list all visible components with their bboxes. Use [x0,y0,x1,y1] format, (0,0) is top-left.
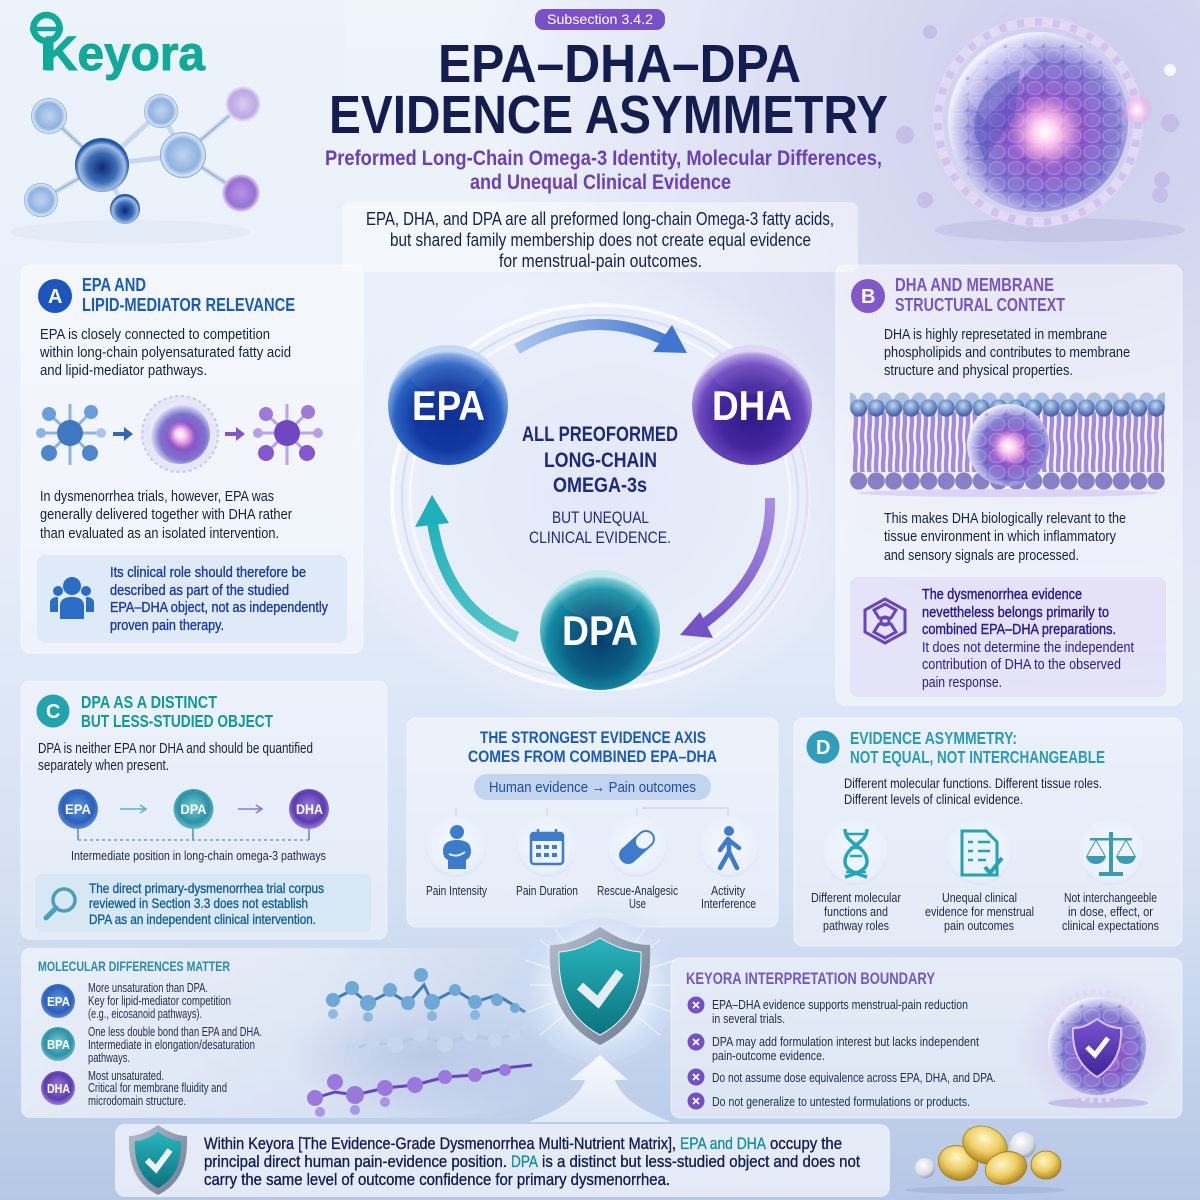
arrow: EPA to DHA [517,324,687,353]
label: molecular [811,890,902,933]
molecule illustration [10,86,261,244]
item 1: EPA–DHA evidence supports menstrual-pain reduction [712,997,968,1012]
central statement [522,423,678,547]
panel A: EPA and lipid-mediator relevance [21,265,363,653]
callout text B: pain response. [922,674,1002,691]
sphere: DHA row [41,1071,75,1105]
arrow: DPA to EPA [415,495,517,637]
text: BPA row: pathways. [88,1051,130,1065]
heading D: EVIDENCE ASYMMETRY: [850,728,1017,748]
text: EPA trials [40,488,292,542]
badge: Subsection [535,9,665,30]
icon: blue molecule [36,404,106,465]
text: EPA intro [39,326,291,379]
panel: bottom conclusion [115,1124,890,1197]
list: boundary statements [688,996,996,1110]
conclusion text: occupy the [770,1134,842,1153]
icon: DNA [822,819,888,885]
sphere: DPA small [174,789,214,829]
label: clinical evidence: evidence for menstrual [925,904,1034,919]
sphere: EPA row [41,984,75,1018]
pill: human evidence: Human evidence → Pain outcomes [489,779,696,796]
heading D: NOT EQUAL, NOT INTERCHANGEABLE [850,747,1105,767]
label: clinical evidence: pain outcomes [944,918,1014,933]
heading B: STRUCTURAL CONTEXT [895,294,1066,315]
icon: capsule [607,817,667,877]
icon: scales [1078,819,1144,885]
callout text C [89,880,324,927]
icon: glowing cell [142,396,218,472]
label: activity interference: Interference [701,896,756,911]
central statement: ALL PREOFORMED [522,423,678,446]
item 2 [688,1034,979,1063]
badge A: A [48,286,62,308]
logo: Keyora: Keyora [43,28,205,81]
arrow: DHA to DPA [680,498,770,638]
icon: people [50,577,94,619]
callout text A: EPA–DHA object, not as independently [110,599,328,616]
text: EPA trials: than evaluated as an isolated intervention. [40,525,279,542]
heading [468,728,717,766]
heading B [895,274,1066,315]
text: DHA row: microdomain structure. [88,1094,186,1108]
callout text B: combined EPA–DHA preparations. [922,621,1116,638]
illustration: softgel capsules [905,1119,1065,1194]
intro text block: but shared family membership does not create equal evidence [390,230,811,250]
text: DHA intro: DHA is highly represetated in membrane [884,326,1107,343]
sphere: EPA [388,345,508,465]
text: EPA row: (e.g., eicosanoid pathways). [88,1007,202,1021]
label: molecular: functions and [824,904,888,919]
intro text block: for menstrual-pain outcomes. [499,251,702,271]
item 4: Do not generalize to untested formulations or products. [712,1094,970,1109]
heading C: BUT LESS-STUDIED OBJECT [81,711,273,731]
text: differences: Different molecular functions. Different tissue roles. [844,775,1102,791]
callout text A: described as part of the studied [110,582,289,599]
badge D [806,730,840,764]
text: EPA intro: EPA is closely connected to competition [40,326,270,343]
title: EPA–DHA–DPA [438,34,801,94]
illustration: cell with purple shield [1043,992,1151,1108]
illustration: blue fatty-acid chain [326,968,525,1022]
panel B: DHA and membrane structural context [836,265,1182,705]
heading C [81,692,273,731]
callout text A: proven pain therapy. [110,617,224,634]
central cycle diagram [388,305,812,690]
text: DHA relevance [884,510,1126,564]
conclusion text: Within Keyora [The Evidence-Grade Dysmenorrhea Multi-Nutrient Matrix], [204,1134,676,1153]
panel: Keyora interpretation boundary [671,958,1182,1118]
label: clinical evidence [925,890,1034,933]
sphere: BPA row [41,1027,75,1061]
text: differences [844,775,1102,807]
label: clinical evidence: Unequal clinical [942,890,1017,905]
title: EVIDENCE ASYMMETRY [329,85,888,145]
sphere: DHA [692,345,812,465]
text: DHA intro: structure and physical properties. [884,362,1073,379]
callout A [37,555,347,643]
label: not interchangeable: clinical expectations [1062,918,1159,933]
central statement: OMEGA-3s [553,474,647,497]
badge: Subsection: Subsection 3.4.2 [547,11,653,27]
text: DHA intro [884,326,1130,379]
text: BPA row: One less double bond than EPA and DHA. [88,1025,262,1039]
label: activity interference [701,883,756,911]
text: EPA intro: and lipid-mediator pathways. [40,362,207,379]
arrow: upward swoosh [528,1055,672,1122]
item 2: pain-outcome evidence. [712,1048,825,1063]
badge B [851,279,885,313]
badge D: D [816,737,830,759]
callout text C: The direct primary-dysmenorrhea trial corpus [89,880,324,896]
badge B: B [861,286,875,308]
text: DHA intro: phospholipids and contributes to membrane [884,344,1130,361]
label: rescue-analgesic use [597,883,678,911]
subtitle: Preformed Long-Chain Omega-3 Identity, Molecular Differences, [325,147,882,170]
arrow [225,427,245,441]
conclusion text: is a distinct but less-studied object and does not [542,1152,860,1171]
sphere: BPA row: BPA [47,1037,71,1052]
panel D: evidence asymmetry [794,718,1182,946]
heading: MOLECULAR DIFFERENCES MATTER [38,958,230,974]
panel: molecular differences matter [21,948,565,1118]
text: DPA intro [38,741,313,774]
panel C: DPA as a distinct object [21,681,387,939]
label: not interchangeable: Not interchangeeble [1064,890,1157,905]
icon: walking person [699,817,759,877]
illustration: pale fatty-acid chain [345,1026,522,1057]
panel: strongest evidence axis [407,718,778,927]
heading A [82,274,295,315]
icon: pain intensity [426,817,486,877]
text: DHA relevance: and sensory signals are processed. [884,547,1079,564]
label: molecular: pathway roles [823,918,889,933]
item 3: Do not assume dose equivalence across EPA, DHA, and DPA. [712,1070,996,1085]
heading A: EPA AND [82,274,146,295]
central statement: LONG-CHAIN [544,449,657,472]
icon: magnifier [46,889,75,918]
text: DHA row: Critical for membrane fluidity and [88,1081,227,1095]
text: BPA row: Intermediate in elongation/desaturation [88,1038,255,1052]
sphere: DPA [540,570,660,690]
text: DHA row: Most unsaturated. [88,1069,164,1083]
text: EPA row: More unsaturation than DPA. [88,981,208,995]
callout text A: Its clinical role should therefore be [110,564,306,581]
heading: KEYORA INTERPRETATION BOUNDARY [686,969,936,988]
sphere: DHA small: DHA [296,801,323,817]
item 1: in several trials. [712,1011,785,1026]
item 1 [688,996,968,1026]
label: pain intensity: Pain Intensity [426,883,487,898]
heading A: LIPID-MEDIATOR RELEVANCE [82,294,295,315]
conclusion text: carry the same level of outcome confidence for primary dysmenorrhea. [204,1170,670,1189]
text: EPA intro: within long-chain polyensaturated fatty acid [39,344,291,361]
heading: COMES FROM COMBINED EPA–DHA [468,747,717,766]
sphere: DHA small [289,789,329,829]
sphere: DHA row: DHA [47,1081,70,1096]
central statement: BUT UNEQUAL [552,508,649,527]
subtitle: and Unequal Clinical Evidence [470,171,731,194]
callout C [35,874,371,932]
label: pain duration: Pain Duration [516,883,578,898]
heading B: DHA AND MEMBRANE [895,274,1054,295]
label: not interchangeable: in dose, effect, or [1068,904,1154,919]
conclusion text: DPA [511,1152,539,1171]
text: DPA intro: separately when present. [38,758,169,774]
caption: Intermediate position in long-chain omega-3 pathways [71,848,326,863]
text: differences: Different levels of clinical evidence. [844,791,1023,807]
icon: checklist document [946,819,1012,885]
callout text B: contribution of DHA to the observed [922,656,1121,673]
callout text A [110,564,328,634]
intro text block: EPA, DHA, and DPA are all preformed long-chain Omega-3 fatty acids, [366,209,834,229]
subtitle [325,147,882,194]
sphere: DPA small: DPA [180,801,206,817]
sphere: EPA row: EPA [47,994,71,1009]
intro text block [342,202,858,272]
text: EPA trials: generally delivered together with DHA rather [40,506,292,523]
label: molecular: Different molecular [811,890,902,905]
callout B [850,577,1166,697]
item 3 [688,1068,996,1086]
label: rescue-analgesic use: Rescue-Analgesic [597,883,678,898]
diagram: EPA DPA DHA pathway [58,789,329,863]
callout text B: It does not determine the independent [922,639,1135,656]
heading: THE STRONGEST EVIDENCE AXIS [480,728,706,747]
callout text B: The dysmenorrhea evidence [922,586,1082,603]
icon: shield [129,1125,187,1195]
heading D [850,728,1105,767]
arrow [113,427,133,441]
conclusion text: principal direct human pain-evidence position. [204,1152,507,1171]
illustration: membrane bilayer [850,392,1165,497]
label: activity interference: Activity [711,883,745,898]
heading C: DPA AS A DISTINCT [81,692,217,712]
label: rescue-analgesic use: Use [629,896,646,911]
callout text B [922,586,1135,691]
sphere: EPA small: EPA [65,801,91,817]
callout text C: reviewed in Section 3.3 does not establish [89,895,308,911]
central statement: CLINICAL EVIDENCE. [529,528,671,547]
label: not interchangeable [1062,890,1159,933]
badge C: C [46,701,60,723]
sphere: DPA: DPA [562,607,638,654]
text: BPA row [88,1025,262,1065]
icon: hexagon [865,599,905,643]
badge A [38,279,72,313]
sphere: DHA: DHA [712,382,792,429]
text: DHA relevance: This makes DHA biologically relevant to the [884,510,1126,527]
text: DPA intro: DPA is neither EPA nor DHA and should be quantified [38,741,313,757]
item 2: DPA may add formulation interest but lacks independent [712,1034,979,1049]
sphere: EPA small [58,789,98,829]
title [329,34,888,145]
callout text B: nevettheless belongs primarily to [922,604,1109,621]
text: EPA trials: In dysmenorrhea trials, however, EPA was [40,488,274,505]
text: EPA row: Key for lipid-mediator competition [88,994,231,1008]
illustration: cell with glowing core [896,22,1185,242]
text: DHA relevance: tissue environment in which inflammatory [884,528,1116,545]
emblem: central shield with burst [512,897,688,1073]
icon: purple molecule [253,404,323,465]
callout text C: DPA as an independent clinical intervention. [89,911,316,927]
icon: calendar [517,817,577,877]
conclusion text: EPA and DHA [680,1134,767,1153]
badge C [36,694,70,728]
text: DHA row [88,1069,227,1108]
item 4 [688,1092,970,1110]
illustration: purple fatty-acid chain [307,1064,532,1117]
text: EPA row [88,981,231,1021]
pill: human evidence [474,774,711,800]
conclusion text [204,1134,860,1189]
sphere: EPA: EPA [412,382,485,429]
